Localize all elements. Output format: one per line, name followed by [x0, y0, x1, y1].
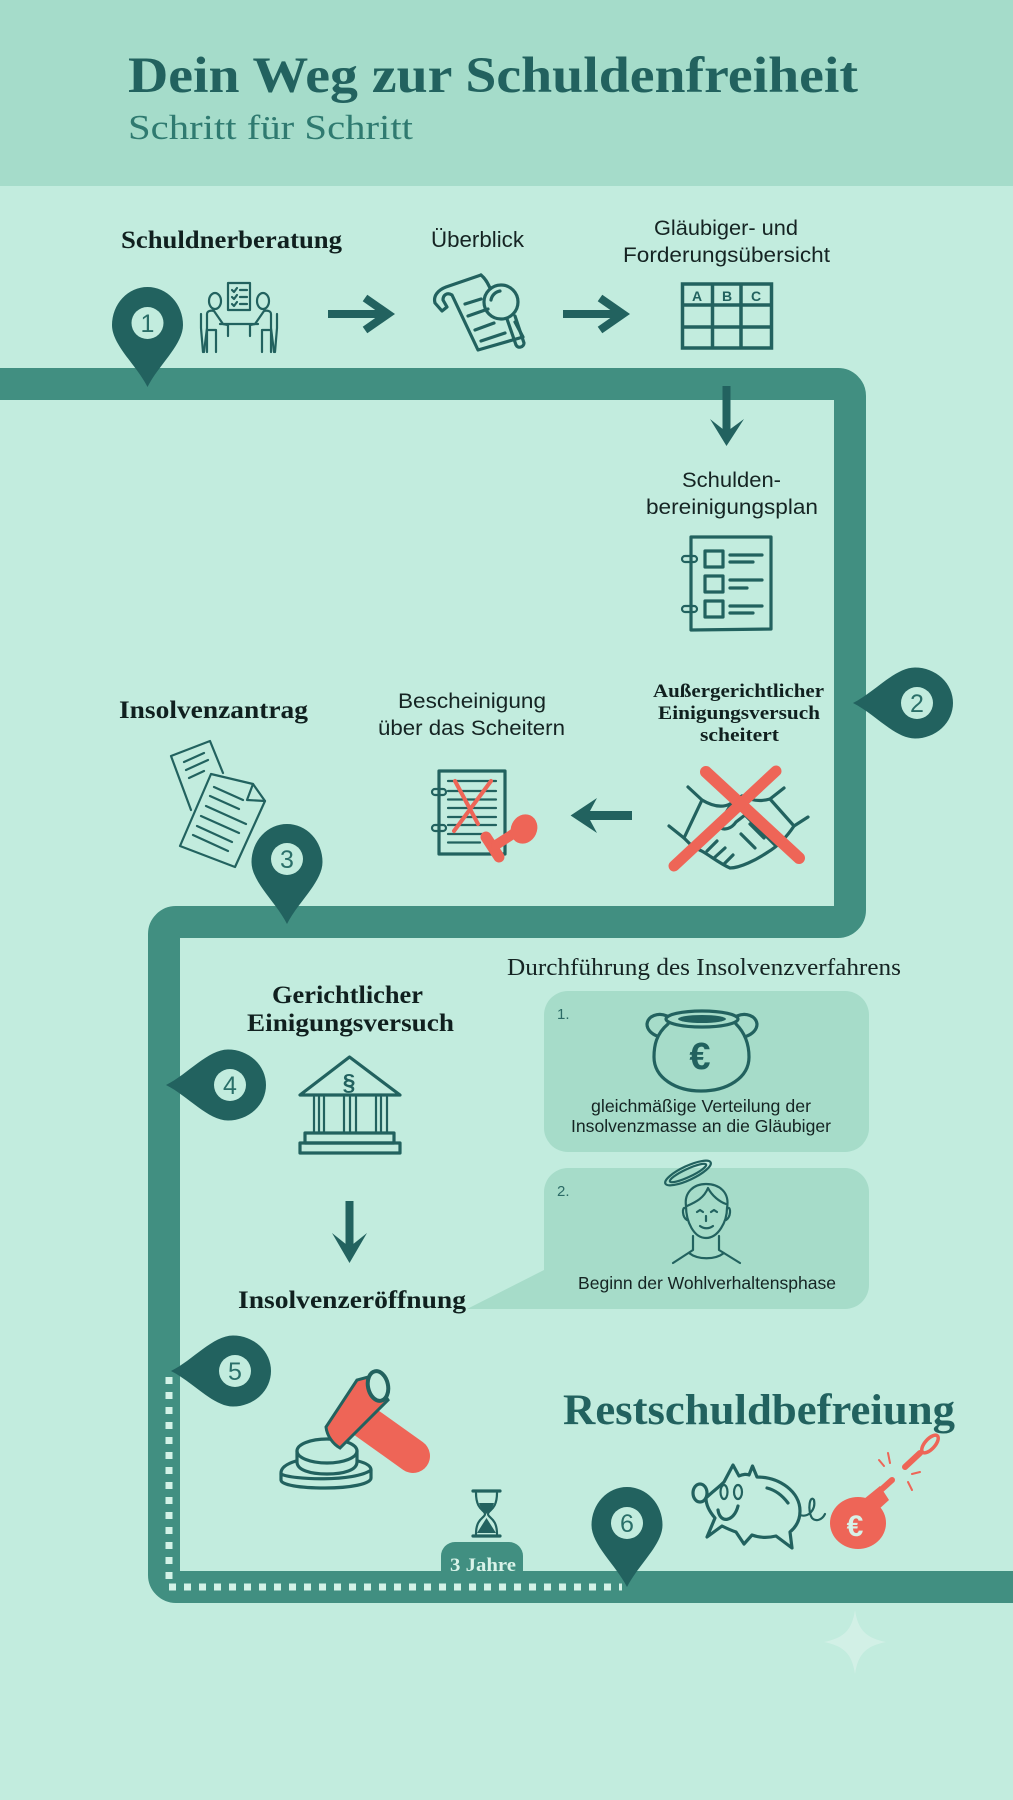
heading: Außergerichtlicher Einigungsversuch scheitert: Einigungsversuch [658, 703, 820, 724]
heading: Gerichtlicher Einigungsversuch [247, 982, 454, 1037]
arrow [328, 298, 388, 330]
label: Gläubiger- und Forderungsübersicht: Forderungsübersicht [623, 244, 830, 267]
icon: gavel [281, 1369, 413, 1488]
icon: hourglass [473, 1491, 500, 1536]
heading: Restschuldbefreiung: Restschuldbefreiung [563, 1387, 956, 1434]
heading: Insolvenzeröffnung: Insolvenzeröffnung [238, 1287, 467, 1314]
icon: person with halo [662, 1156, 740, 1263]
pin 6 [592, 1487, 662, 1587]
icon: courthouse: § [343, 1069, 355, 1095]
arrow left [571, 798, 632, 833]
label: Schuldenbereinigungsplan [646, 469, 818, 519]
label: Gläubiger- und Forderungsübersicht [623, 217, 830, 267]
pin 5 [171, 1336, 271, 1406]
icon: table: B [722, 288, 732, 304]
icon: table: A [692, 288, 702, 304]
title: Dein Weg zur Schuldenfreiheit [128, 48, 858, 104]
pin 3 [252, 824, 322, 924]
icon: courthouse [300, 1057, 400, 1153]
arrow [563, 298, 623, 330]
heading: Durchführung des Insolvenzverfahrens: Durchführung des Insolvenzverfahrens [507, 955, 901, 981]
label: Bescheinigung über das Scheitern: Bescheinigung [398, 690, 546, 713]
pin 4: 4 [223, 1072, 237, 1100]
label: Überblick: Überblick [431, 227, 525, 252]
header band [0, 0, 1013, 186]
label: 3 Jahre [441, 1542, 523, 1576]
pin 2: 2 [910, 690, 924, 718]
heading: Insolvenzantrag: Insolvenzantrag [119, 697, 309, 724]
subtitle: Schritt für Schritt [128, 108, 413, 147]
icon: broken chain and weight [830, 1432, 941, 1549]
panel: step 2 [467, 1156, 869, 1309]
step 1 heading: Schuldnerberatung [121, 227, 343, 254]
arrow down [710, 386, 744, 446]
heading: Gerichtlicher Einigungsversuch: Einigungsversuch [247, 1010, 454, 1037]
panel number: 1. [557, 1006, 570, 1023]
heading: Außergerichtlicher Einigungsversuch scheitert: Außergerichtlicher [653, 681, 825, 702]
pin 3: 3 [280, 846, 294, 874]
icon: consultation [201, 283, 277, 352]
icon: pot with euro [647, 1011, 757, 1091]
panel text: gleichmäßige Verteilung der [591, 1096, 811, 1116]
route path [0, 384, 1013, 1587]
icon: certificate with stamp [432, 771, 542, 857]
pin 6: 6 [620, 1510, 634, 1538]
pin 1 [112, 287, 183, 387]
panel text: Insolvenzmasse an die Gläubiger [571, 1116, 831, 1136]
pin 2 [853, 668, 953, 738]
icon: failed handshake [669, 771, 808, 868]
panel text [571, 1096, 831, 1136]
icon: pot with euro: € [689, 1036, 711, 1078]
decorative sparkle [824, 1610, 886, 1674]
pin 1: 1 [141, 310, 154, 338]
icon: table [682, 284, 772, 348]
label: Schuldenbereinigungsplan: bereinigungsplan [646, 496, 818, 519]
label: Schuldenbereinigungsplan: Schulden- [682, 469, 781, 492]
icon: scroll with magnifier [435, 275, 524, 350]
icon: broken chain and weight: € [847, 1510, 864, 1543]
pin 5: 5 [228, 1358, 242, 1386]
heading: Gerichtlicher Einigungsversuch: Gerichtlicher [272, 982, 423, 1009]
label: Bescheinigung über das Scheitern: über das Scheitern [378, 717, 565, 740]
icon: piggy bank [693, 1465, 825, 1548]
heading: Außergerichtlicher Einigungsversuch scheitert: scheitert [700, 725, 780, 746]
dotted three-year segment [169, 1377, 622, 1587]
icon: plan checklist [682, 537, 771, 630]
heading: Außergerichtlicher Einigungsversuch scheitert [653, 681, 825, 746]
panel number: 2. [557, 1183, 570, 1200]
icon: application papers [171, 741, 265, 867]
panel text: Beginn der Wohlverhaltensphase [578, 1273, 836, 1293]
panel: step 1 [544, 991, 869, 1152]
pin 4 [166, 1050, 266, 1120]
label: 3 Jahre: 3 Jahre [450, 1555, 516, 1576]
label: Gläubiger- und Forderungsübersicht: Gläubiger- und [654, 217, 798, 240]
label: Bescheinigung über das Scheitern [378, 690, 565, 740]
arrow down [332, 1201, 367, 1263]
icon: table: C [751, 288, 761, 304]
